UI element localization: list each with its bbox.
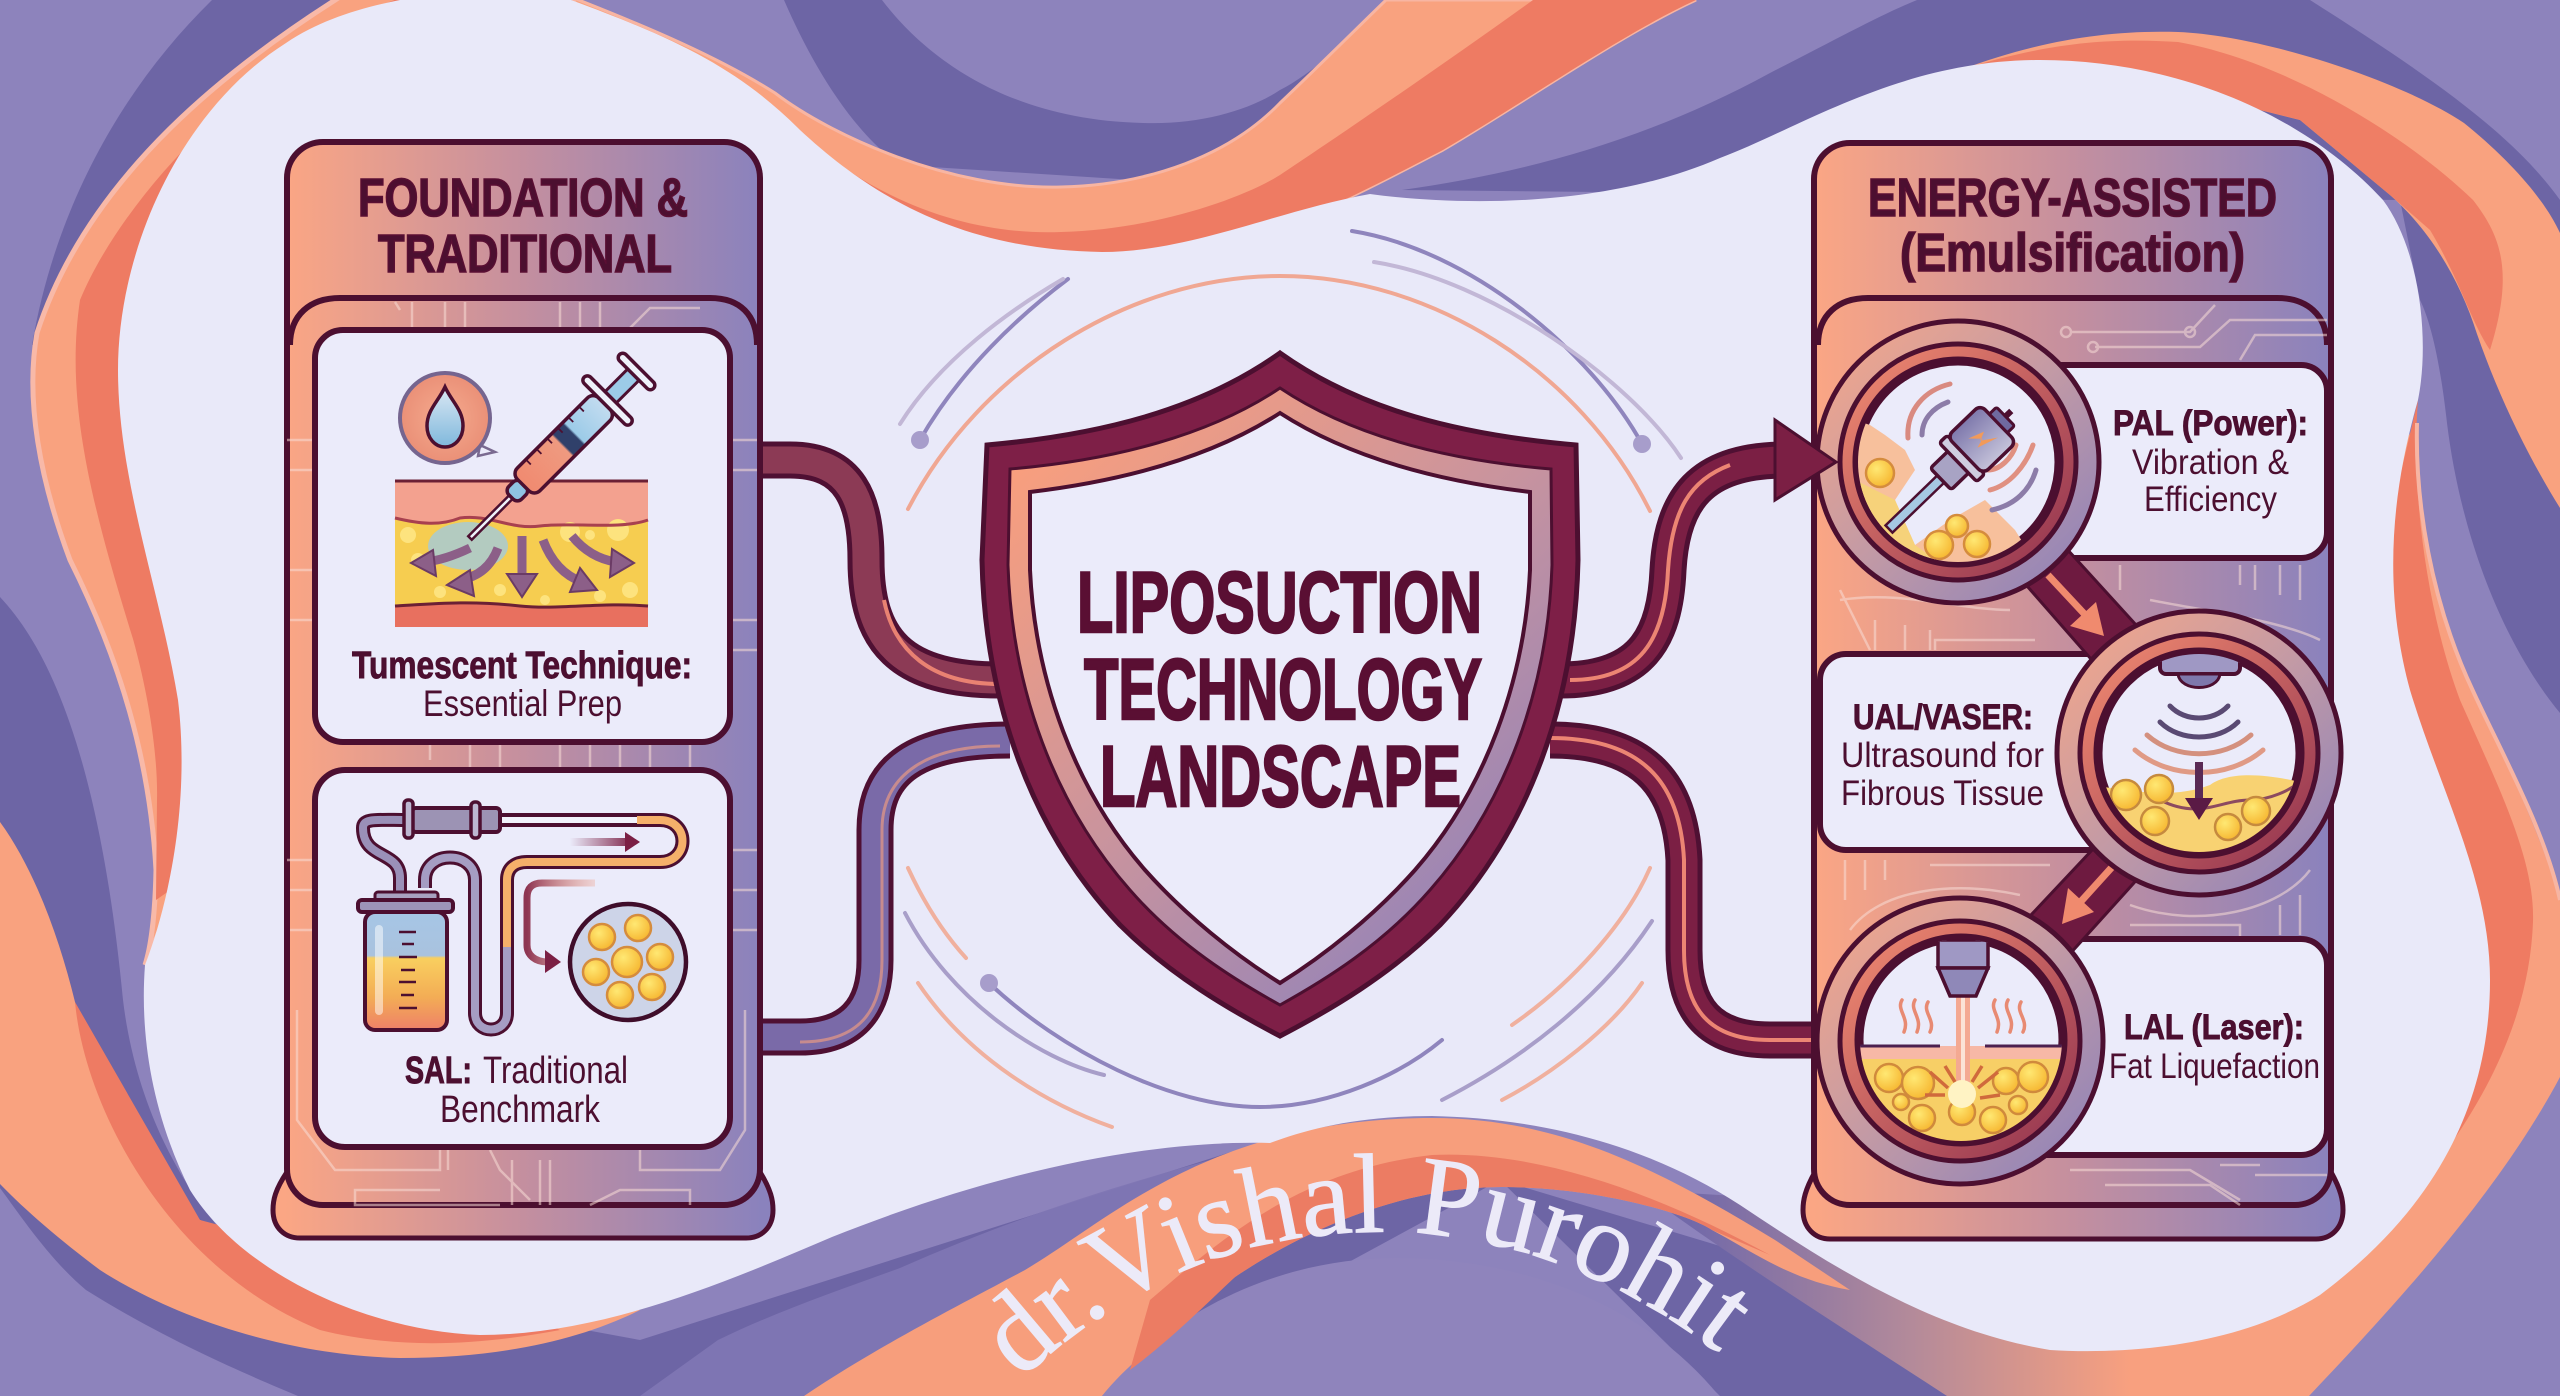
heading: foundation and traditional: FOUNDATION & (358, 168, 688, 228)
heading: energy assisted (1868, 168, 2277, 283)
connector: foundation lower tube to shield (755, 740, 1010, 1042)
title: liposuction technology landscape: LANDSCAPE (1100, 729, 1461, 825)
card: PAL label: Efficiency (2144, 480, 2277, 519)
card: LAL label (1950, 939, 2327, 1155)
card: LAL label: LAL (Laser): (2124, 1008, 2304, 1047)
icon: collection jar (358, 892, 453, 1030)
connector: shield to LAL tube (1550, 738, 1830, 1040)
card: LAL label: Fat Liquefaction (2109, 1047, 2320, 1086)
icon: syringe (447, 345, 663, 561)
orange wave: bottom centre arch (804, 1118, 1850, 1396)
decorative arcs around shield (900, 231, 1681, 1127)
watermark: dr.Vishal Purohit: dr.Vishal Purohit (992, 1153, 1748, 1370)
caption: SAL: Traditional (483, 1050, 628, 1092)
caption: SAL: Benchmark (440, 1089, 601, 1131)
heading: energy assisted: (Emulsification) (1900, 223, 2245, 283)
panel: energy assisted (1775, 143, 2343, 1239)
circle: UAL ultrasound (2057, 611, 2341, 895)
illustration: suction tubing (363, 800, 682, 1030)
card: PAL label: Vibration & (2132, 443, 2289, 482)
card: SAL (315, 770, 730, 1147)
card: UAL label: UAL/VASER: (1853, 698, 2033, 737)
connector: foundation top tube to shield (755, 460, 1000, 684)
heading: foundation and traditional (358, 168, 688, 284)
arrowhead: into PAL (1775, 420, 1836, 500)
title: liposuction technology landscape (1077, 555, 1482, 825)
connector: shield to PAL tube (1560, 460, 1785, 680)
card: UAL label: Fibrous Tissue (1841, 774, 2044, 813)
caption: tumescent technique: Essential Prep (423, 683, 622, 724)
arrows: flow direction (527, 832, 640, 973)
heading: energy assisted: ENERGY-ASSISTED (1868, 168, 2277, 228)
circle: LAL laser (1817, 898, 2103, 1184)
orange wave: bottom left (0, 822, 640, 1358)
card: PAL label (1950, 365, 2327, 558)
orange wave: top centre (571, 0, 1696, 300)
card: tumescent technique (315, 330, 730, 742)
title: liposuction technology landscape: LIPOSUCTION (1077, 555, 1482, 651)
arrow: UAL to LAL (2015, 832, 2151, 966)
card: UAL label (1820, 654, 2120, 850)
caption: SAL (405, 1050, 628, 1131)
caption: tumescent technique (352, 645, 692, 724)
heading: foundation and traditional: TRADITIONAL (378, 224, 672, 284)
circle: PAL device (1817, 321, 2099, 603)
icon: water drop bubble (400, 373, 495, 463)
icon: fat cells (570, 904, 686, 1020)
illustration: skin layers (395, 481, 648, 627)
title: liposuction technology landscape: TECHNOLOGY (1084, 642, 1482, 738)
icons: spread arrows (411, 536, 634, 597)
arrow: PAL to UAL (2013, 537, 2147, 675)
shield: central title (982, 353, 1578, 1036)
card: PAL label: PAL (Power): (2113, 404, 2308, 443)
card: UAL label: Ultrasound for (1841, 736, 2044, 775)
orange wave: left (33, 0, 440, 965)
orange wave: top right (1960, 32, 2560, 508)
caption: SAL: SAL: (405, 1050, 472, 1092)
orange to purple wave: bottom right (1640, 400, 2560, 1396)
caption: tumescent technique: Tumescent Technique: (352, 645, 692, 687)
panel: foundation and traditional (273, 142, 773, 1238)
